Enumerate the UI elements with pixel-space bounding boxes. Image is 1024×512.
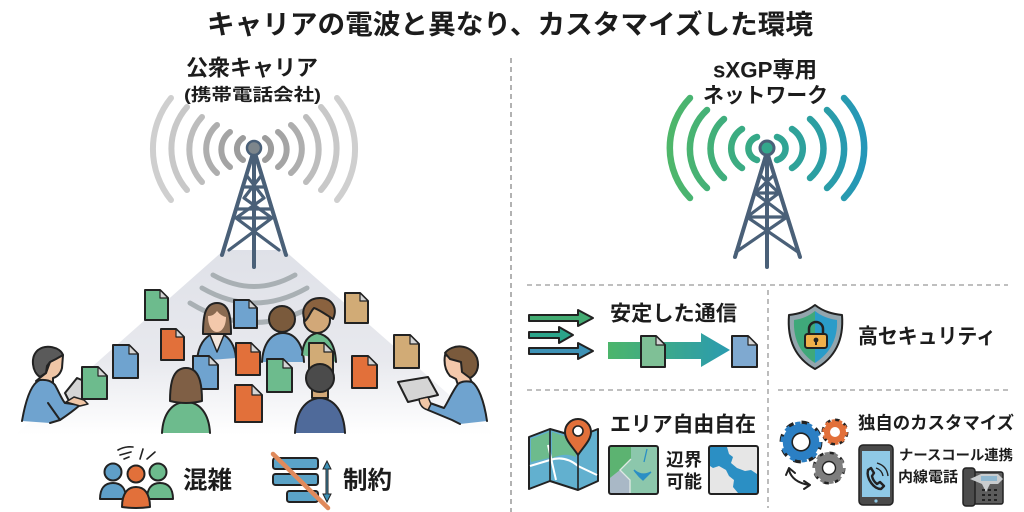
heading: high security: 高セキュリティ: [858, 326, 996, 348]
divider: left and right halves: [510, 58, 512, 512]
person: woman in green: [302, 298, 336, 362]
icon: grey signal waves: [153, 98, 355, 200]
document: held by left person: [82, 367, 107, 399]
crowd: people in the back row: [197, 298, 336, 362]
label: boundary capable: 可能: [666, 472, 702, 492]
label: boundary capable: [666, 450, 702, 492]
label: restrictions: 制約: [343, 466, 392, 494]
document: orange: [352, 356, 377, 388]
person: right side with tablet: [398, 346, 487, 424]
document: green: [267, 359, 292, 392]
heading: public carrier: (携帯電話会社): [184, 86, 321, 104]
heading: public carrier: 公衆キャリア: [186, 56, 318, 80]
heading: public carrier: [184, 56, 321, 104]
icon: gears: [783, 421, 846, 489]
icon: coloured signal waves: [670, 98, 864, 198]
arrow: data flow: [608, 333, 730, 367]
title: キャリアの電波と異なり、カスタマイズした環境: [207, 9, 813, 40]
icon: restricted bandwidth: [273, 454, 331, 508]
label: nurse call integration: ナースコール連携: [899, 447, 1013, 463]
document: blue: [113, 345, 138, 378]
icon: three parallel arrows: [529, 310, 593, 359]
person: left side with tablet: [22, 347, 107, 423]
person: woman in blue: [197, 303, 236, 361]
panel: high security: [789, 305, 996, 369]
icon: boundary tile: [709, 446, 758, 494]
document: green sender: [641, 336, 665, 367]
person: man in front: [295, 364, 345, 433]
panel: custom integration: [783, 413, 1014, 506]
document: orange: [236, 343, 260, 375]
heading: sXGP private network: [703, 58, 828, 108]
icon: shield with padlock: [789, 305, 842, 369]
document: blue receiver: [732, 336, 757, 367]
dividers: feature grid: [527, 285, 1008, 508]
document: blue: [193, 356, 218, 389]
heading: sXGP private network: ネットワーク: [703, 84, 828, 108]
label: congestion: 混雑: [183, 466, 232, 494]
heading: custom integration: 独自のカスタマイズ: [858, 413, 1014, 433]
icon: signal reaching the crowd: [190, 275, 318, 322]
document: blue: [234, 300, 257, 328]
icon: terrain tile: [609, 446, 658, 494]
document: tan: [309, 343, 333, 374]
document: tan: [345, 293, 368, 323]
panel: flexible area: [529, 414, 758, 494]
documents scattered in the crowd: [113, 290, 419, 422]
document: orange: [161, 329, 184, 360]
heading: flexible area: エリア自由自在: [610, 414, 756, 436]
crowd: people in the front row: [162, 364, 345, 433]
icon: folded map with pin: [529, 419, 598, 490]
icon: congestion: [100, 447, 173, 508]
label: extension phone: 内線電話: [898, 468, 959, 486]
document: green: [145, 290, 168, 320]
icon: right tower: [735, 141, 800, 267]
person: man in blue: [262, 306, 304, 362]
coverage cone: [15, 250, 495, 435]
icon: left tower: [222, 141, 286, 267]
document: tan: [394, 335, 419, 368]
heading: sXGP private network: sXGP専用: [713, 58, 817, 82]
person: woman in front: [162, 368, 210, 433]
icon: smartphone with call: [859, 445, 893, 505]
heading: stable communication: 安定した通信: [610, 302, 737, 326]
icon: desk phone: [963, 468, 1003, 506]
panel: stable communication: [529, 302, 757, 367]
label: boundary capable: 辺界: [666, 450, 702, 470]
document: orange: [235, 385, 262, 422]
